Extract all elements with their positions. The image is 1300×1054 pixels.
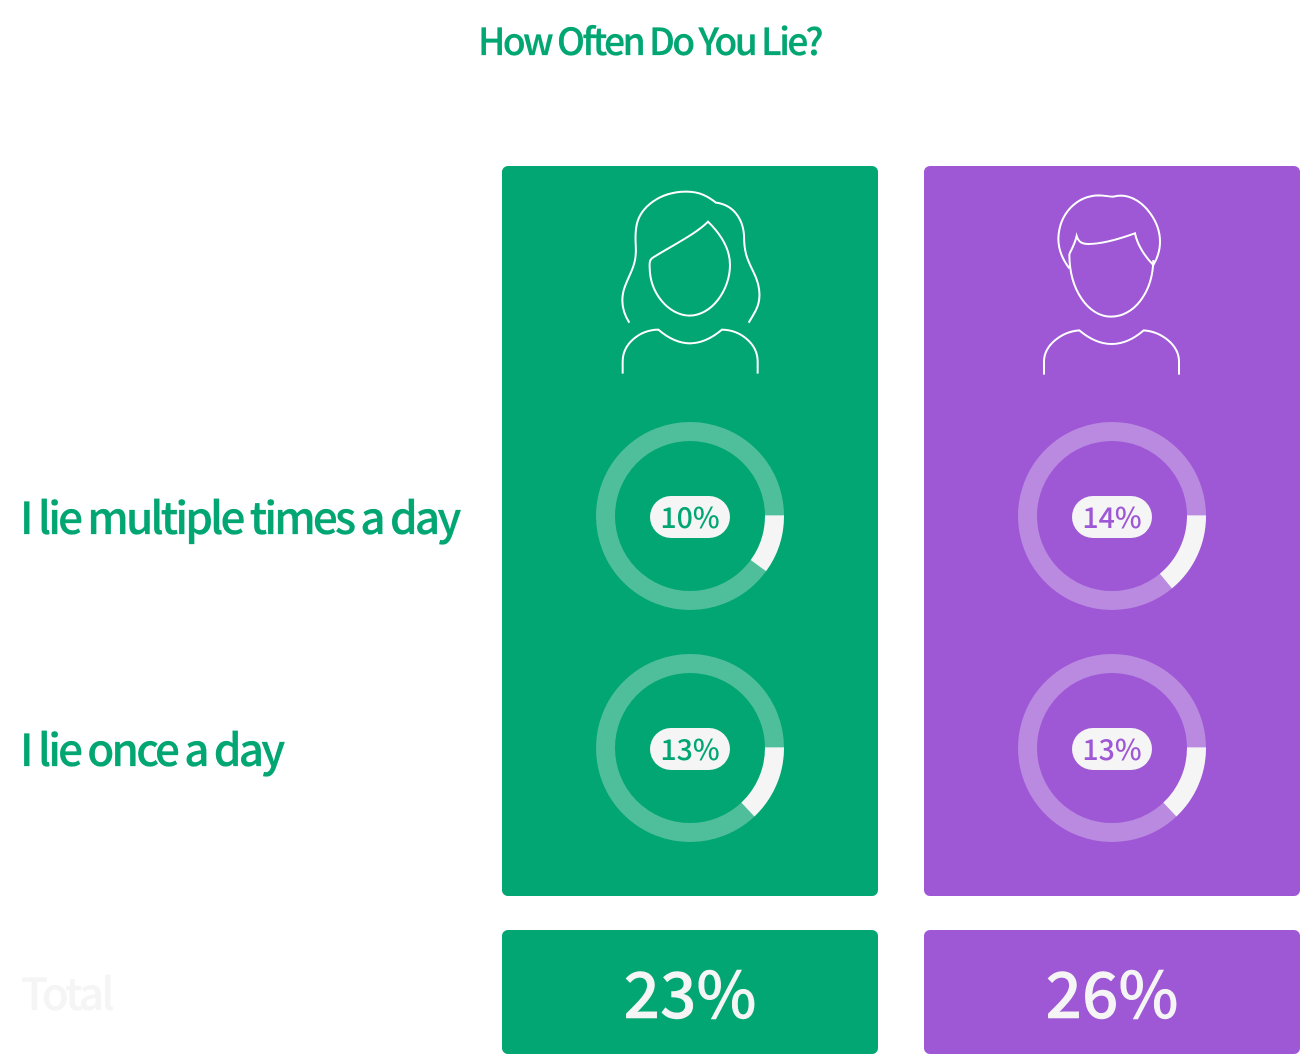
panel: women xyxy=(502,166,878,896)
title: How Often Do You Lie? xyxy=(478,12,821,66)
donut: men 13% xyxy=(1028,664,1196,832)
label pill: women 10%: 10% xyxy=(660,496,720,537)
label pill: men 14%: 14% xyxy=(1082,496,1142,537)
row label: total: Total xyxy=(21,959,112,1023)
total: women: 23% xyxy=(623,945,757,1037)
row label: multiple times a day: I lie multiple times a day xyxy=(20,483,459,547)
row label: once a day: I lie once a day xyxy=(20,715,282,779)
panel: men xyxy=(924,166,1300,896)
donut: men 14% xyxy=(1028,432,1196,600)
icon: woman xyxy=(622,192,759,374)
donut: women 13% xyxy=(606,664,774,832)
panel: men total xyxy=(924,930,1300,1054)
label pill: women 13%: 13% xyxy=(660,728,720,769)
label pill: men 13%: 13% xyxy=(1082,728,1142,769)
panel: women total xyxy=(502,930,878,1054)
total: men: 26% xyxy=(1045,945,1179,1037)
icon: man xyxy=(1044,195,1179,375)
donut: women 10% xyxy=(606,432,774,600)
